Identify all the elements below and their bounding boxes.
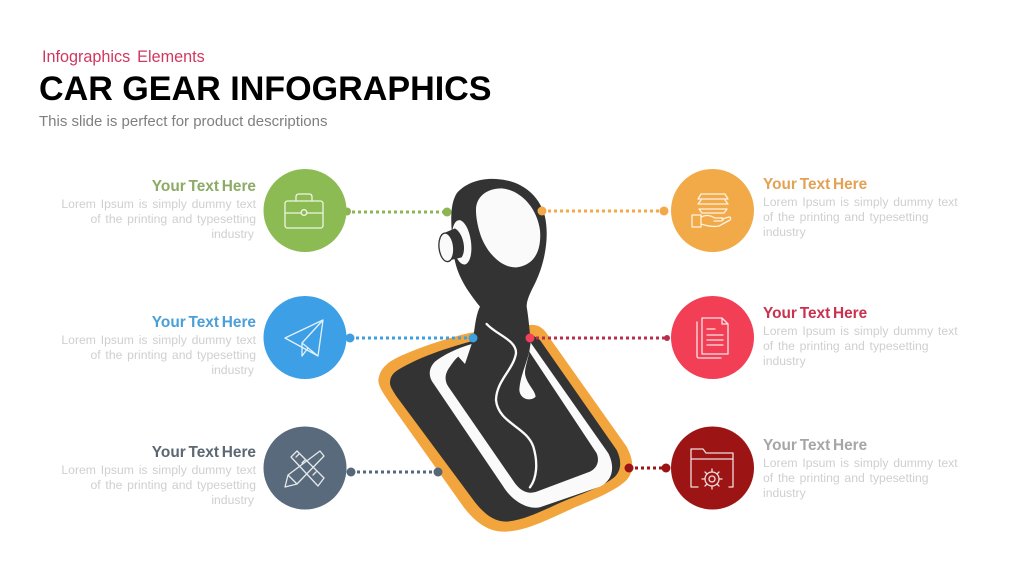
connector: red [526, 334, 670, 342]
knob highlight [476, 188, 540, 267]
text block: green [61, 178, 257, 241]
text block: orange: of the printing and typesetting [763, 210, 929, 224]
text block: orange: Lorem Ipsum is simply dummy text [763, 195, 958, 209]
text block: blue: Lorem Ipsum is simply dummy text [61, 333, 257, 347]
connector: blue [346, 334, 478, 342]
title: CAR GEAR INFOGRAPHICS [39, 70, 492, 108]
text block: gray: of the printing and typesetting [763, 471, 929, 485]
text block: slate: Your Text Here [152, 444, 256, 461]
text block: blue: of the printing and typesetting [90, 348, 256, 362]
connector: orange [538, 206, 668, 216]
text block: red: of the printing and typesetting [763, 339, 929, 353]
text block: blue: industry [211, 363, 255, 377]
text block: gray: industry [763, 486, 807, 500]
text block: slate: Lorem Ipsum is simply dummy text [61, 463, 257, 477]
side button [438, 219, 474, 266]
connector: dark red [624, 464, 670, 472]
text block: red: Lorem Ipsum is simply dummy text [763, 324, 958, 338]
text block: gray [763, 437, 958, 500]
white drip [519, 352, 536, 399]
text block: slate: of the printing and typesetting [90, 478, 256, 492]
gear shifter illustration [378, 179, 632, 532]
text block: red: industry [763, 354, 807, 368]
dark plate [390, 333, 620, 522]
text block: slate [61, 444, 257, 507]
text block: slate: industry [211, 493, 255, 507]
thin white line [487, 324, 536, 487]
orange plate [378, 325, 632, 532]
connector: green [343, 208, 452, 216]
circle: folder with gear [671, 426, 754, 510]
text block: orange: Your Text Here [763, 176, 868, 193]
circle: briefcase [264, 169, 346, 252]
white shift track [430, 343, 612, 508]
text block: orange [763, 176, 958, 239]
text block: green: of the printing and typesetting [90, 212, 256, 226]
text block: green: industry [211, 227, 255, 241]
text block: blue [61, 314, 257, 377]
text block: gray: Lorem Ipsum is simply dummy text [763, 456, 958, 470]
text block: orange: industry [763, 225, 807, 239]
connector: slate [346, 468, 442, 476]
text block: green: Your Text Here [152, 178, 256, 195]
eyebrow: Infographics Elements: Infographics Elements [42, 48, 205, 66]
circle: paper plane [264, 296, 346, 379]
knob and neck [451, 179, 547, 347]
circle: pencil and ruler [264, 426, 346, 510]
circle: hand with stack [671, 169, 754, 252]
text block: red [763, 305, 958, 368]
text block: red: Your Text Here [763, 305, 868, 322]
circle: documents [671, 296, 754, 379]
text block: green: Lorem Ipsum is simply dummy text [61, 197, 257, 211]
text block: gray: Your Text Here [763, 437, 868, 454]
text block: blue: Your Text Here [152, 314, 256, 331]
subtitle: This slide is perfect for product descriptions [39, 113, 327, 130]
